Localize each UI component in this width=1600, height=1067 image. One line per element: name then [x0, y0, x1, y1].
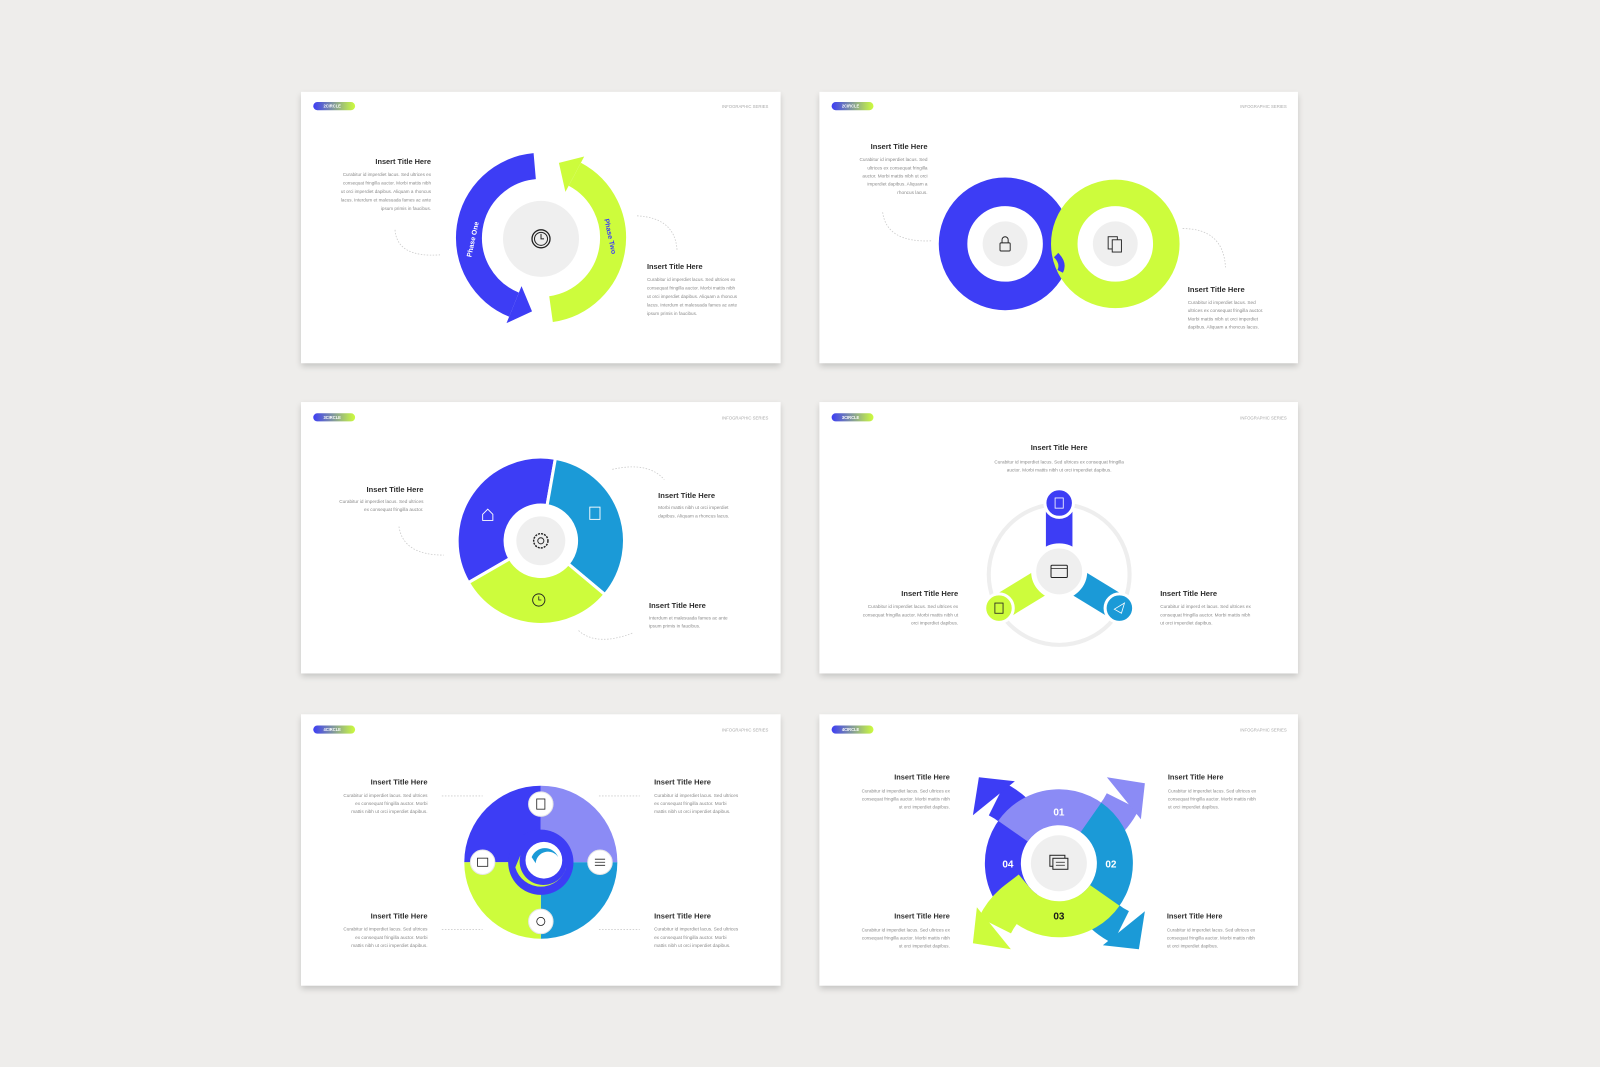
panel: slide 5 four-quadrant swirl	[301, 714, 781, 986]
text block bottom left: ex consequat fringilla auctor. Morbi	[355, 935, 428, 940]
text block right	[1188, 285, 1263, 330]
text block top left: Insert Title Here	[894, 772, 950, 781]
text block left: consequat fringilla auctor. Morbi mattis nibh ut	[863, 612, 959, 617]
arrow 01 lavender	[1013, 777, 1145, 831]
text block top right: mattis nibh ut orci imperdiet dapibus.	[654, 809, 730, 814]
text block right: ut orci imperdiet dapibus.	[1160, 620, 1213, 625]
panel: slide 2 linked rings	[819, 92, 1298, 363]
center folder	[1034, 546, 1085, 597]
text block right: consequat fringilla auctor. Morbi mattis nibh	[1160, 612, 1251, 617]
text block left: consequat fringilla auctor. Morbi mattis nibh	[343, 180, 431, 185]
text block top: Insert Title Here	[1031, 443, 1088, 452]
text block bottom left: ut orci imperdiet dapibus.	[899, 943, 950, 948]
text block right bottom	[649, 601, 728, 629]
header pill: 4CIRCLE	[323, 727, 341, 732]
numbers: 02	[1105, 859, 1117, 870]
arrow phase one blue: Phase One	[466, 221, 481, 258]
header series label: INFOGRAPHIC SERIES	[722, 415, 769, 420]
text block bottom right: mattis nibh ut orci imperdiet dapibus.	[654, 943, 730, 948]
text block left: imperdiet dapibus. Aliquam a	[867, 182, 928, 187]
header pill: 3CIRCLE	[842, 415, 860, 420]
text block right: ipsum primis in faucibus.	[647, 311, 697, 316]
text block right: ultrices ex consequat fringilla auctor.	[1188, 308, 1263, 313]
text block top left	[862, 772, 951, 809]
text block right: Curabitur id imperd et lacus. Sed ultrices ex	[1160, 604, 1252, 609]
text block top right: Curabitur id imperdiet lacus. Sed ultrices	[654, 793, 739, 798]
text block bottom right: Insert Title Here	[654, 911, 711, 920]
text block top left: consequat fringilla auctor. Morbi mattis nibh	[862, 796, 950, 801]
text block bottom right: Curabitur id imperdiet lacus. Sed ultrices	[654, 927, 739, 932]
numbers: 04	[1002, 859, 1014, 870]
dashed leader lines	[442, 796, 640, 930]
connector right	[1183, 229, 1226, 267]
spoke cyan	[1059, 571, 1134, 622]
text block bottom right	[1167, 911, 1256, 948]
segment lime with clock icon	[468, 559, 605, 624]
text block right: consequat fringilla auctor. Morbi mattis nibh	[647, 285, 736, 290]
text block bottom left: consequat fringilla auctor. Morbi mattis nibh	[862, 935, 950, 940]
header pill	[313, 413, 355, 421]
text block top right: ut orci imperdiet dapibus.	[1168, 804, 1219, 809]
text block right: ut orci imperdiet dapibus. Aliquam a rhoncus	[647, 294, 738, 299]
text block right: Curabitur id imperdiet lacus. Sed ultrices ex	[647, 277, 736, 282]
arrows diagram	[973, 777, 1145, 949]
header series label: INFOGRAPHIC SERIES	[1240, 415, 1287, 420]
spoke blue	[1045, 489, 1073, 571]
icon circles	[470, 792, 612, 934]
swirl diagram	[464, 786, 617, 939]
connector left	[395, 230, 440, 255]
numbers: 01	[1053, 807, 1065, 818]
panel: slide 1 two-phase cycle	[301, 92, 781, 363]
header pill	[832, 726, 873, 734]
text block left	[339, 485, 424, 512]
arrow phase two lime: Phase Two	[602, 218, 617, 255]
text block bottom left: mattis nibh ut orci imperdiet dapibus.	[351, 943, 428, 948]
connector left	[399, 527, 444, 555]
text block left: Curabitur id imperdiet lacus. Sed ultrices ex	[343, 172, 432, 177]
text block top right: Insert Title Here	[1168, 772, 1223, 781]
text block left: orci imperdiet dapibus.	[911, 620, 958, 625]
text block left: Curabitur id imperdiet lacus. Sed ultrices	[339, 499, 424, 504]
arrow 02 cyan	[1091, 817, 1145, 949]
text block bottom left: Curabitur id imperdiet lacus. Sed ultrices	[343, 927, 428, 932]
text block top right: Curabitur id imperdiet lacus. Sed ultrices ex	[1168, 788, 1257, 793]
text block bottom left	[343, 911, 428, 948]
connector right top	[612, 467, 664, 480]
text block bottom left: Insert Title Here	[371, 911, 428, 920]
text block left: rhoncus lacus.	[897, 190, 928, 195]
text block bottom right: Insert Title Here	[1167, 911, 1222, 920]
header series label: INFOGRAPHIC SERIES	[1240, 104, 1287, 109]
text block left	[341, 157, 432, 211]
text block right: Morbi mattis nibh ut orci imperdiet	[1188, 316, 1259, 321]
text block bottom right	[654, 911, 739, 948]
text block left: Curabitur id imperdiet lacus. Sed	[860, 157, 928, 162]
segment cyan with book icon	[547, 458, 625, 595]
text block top right: ex consequat fringilla auctor. Morbi	[654, 801, 727, 806]
text block right top: Morbi mattis nibh ut orci imperdiet	[658, 505, 729, 510]
text block top left: Curabitur id imperdiet lacus. Sed ultrices	[343, 793, 428, 798]
segment blue with house icon	[457, 457, 555, 583]
text block right: lacus. Interdum et malesuada fames ac ante	[647, 302, 738, 307]
text block top right	[1168, 772, 1257, 809]
header series label: INFOGRAPHIC SERIES	[1240, 728, 1287, 733]
header series label: INFOGRAPHIC SERIES	[722, 728, 769, 733]
text block top left: Insert Title Here	[371, 778, 428, 787]
header pill: 4CIRCLE	[842, 727, 860, 732]
arrow phase two lime	[551, 157, 617, 309]
text block left: Insert Title Here	[367, 485, 423, 494]
text block bottom left	[862, 911, 951, 948]
text block left: ex consequat fringilla auctor.	[364, 507, 423, 512]
text block top left: mattis nibh ut orci imperdiet dapibus.	[351, 809, 428, 814]
panel: slide 4 three spokes	[819, 402, 1298, 673]
arrow 04 blue	[973, 777, 1027, 909]
panel: slide 6 four arrows	[819, 714, 1298, 986]
text block left: ultrices ex consequat fringilla	[867, 165, 928, 170]
header pill	[313, 726, 355, 734]
text block top left: Curabitur id imperdiet lacus. Sed ultrices ex	[862, 788, 951, 793]
text block bottom left: Curabitur id imperdiet lacus. Sed ultrices ex	[862, 927, 951, 932]
center circle with clock icon	[503, 201, 579, 277]
text block right: Curabitur id imperdiet lacus. Sed	[1188, 300, 1256, 305]
text block top left	[343, 778, 428, 814]
text block top	[994, 443, 1124, 472]
text block left	[860, 142, 928, 195]
text block left: auctor. Morbi mattis nibh ut orci	[862, 174, 928, 179]
text block top right: consequat fringilla auctor. Morbi mattis nibh	[1168, 796, 1256, 801]
icons	[478, 799, 605, 926]
text block left: lacus. Interdum et malesuada fames ac ante	[341, 197, 431, 202]
link blue over lime	[1056, 255, 1062, 271]
text block left: ut orci imperdiet dapibus. Aliquam a rhoncus	[341, 189, 432, 194]
header pill	[313, 102, 355, 110]
text block right: Insert Title Here	[647, 262, 703, 271]
text block right top: dapibus. Aliquam a rhoncus lacus.	[658, 513, 729, 518]
text block top left: ex consequat fringilla auctor. Morbi	[355, 801, 428, 806]
text block top: Curabitur id imperdiet lacus. Sed ultrices ex consequat fringilla	[994, 459, 1124, 464]
text block left: ipsum primis in faucibus.	[381, 206, 431, 211]
header pill: 3CIRCLE	[323, 415, 341, 420]
center gear	[516, 516, 565, 565]
text block right top: Insert Title Here	[658, 491, 715, 500]
text block top right	[654, 778, 739, 814]
text block bottom right: consequat fringilla auctor. Morbi mattis nibh	[1167, 935, 1255, 940]
text block right: Insert Title Here	[1160, 589, 1217, 598]
connector right bottom	[579, 631, 634, 639]
text block left	[863, 589, 959, 625]
text block bottom right: ex consequat fringilla auctor. Morbi	[654, 935, 727, 940]
header pill	[832, 102, 873, 110]
ring lime with document icon	[1064, 193, 1166, 295]
text block top: auctor. Morbi mattis nibh ut orci imperdiet dapibus.	[1007, 467, 1112, 472]
text block right	[1160, 589, 1252, 625]
text block right bottom: Insert Title Here	[649, 601, 706, 610]
ring blue with lock icon	[953, 192, 1057, 296]
text block bottom right: Curabitur id imperdiet lacus. Sed ultrices ex	[1167, 927, 1256, 932]
text block left: Insert Title Here	[871, 142, 928, 151]
arrow 03 lime	[973, 895, 1105, 949]
header pill: 2CIRCLE	[323, 104, 341, 109]
text block right	[647, 262, 738, 316]
text block bottom left: Insert Title Here	[894, 911, 950, 920]
ring outline	[989, 504, 1130, 645]
text block left: Curabitur id imperdiet lacus. Sed ultrices ex	[868, 604, 959, 609]
text block right bottom: ipsum primis in faucibus.	[649, 624, 700, 629]
text block bottom right: ut orci imperdiet dapibus.	[1167, 943, 1218, 948]
text block right: Insert Title Here	[1188, 285, 1245, 294]
text block top right: Insert Title Here	[654, 778, 711, 787]
header pill: 2CIRCLE	[842, 104, 860, 109]
header series label: INFOGRAPHIC SERIES	[722, 104, 769, 109]
text block right top	[658, 491, 729, 518]
arrow phase one blue	[466, 166, 535, 323]
connector right	[637, 216, 677, 250]
panel: slide 3 three-part cycle	[301, 402, 781, 673]
connector left	[883, 212, 932, 241]
header pill	[832, 413, 873, 421]
text block top left: ut orci imperdiet dapibus.	[899, 804, 950, 809]
numbers	[1002, 807, 1117, 922]
text block left: Insert Title Here	[375, 157, 431, 166]
text block right bottom: Interdum et malesuada fames ac ante	[649, 615, 728, 620]
text block right: dapibus. Aliquam a rhoncus lacus.	[1188, 325, 1259, 330]
center icon	[1022, 826, 1096, 900]
numbers: 03	[1053, 911, 1065, 922]
text block left: Insert Title Here	[901, 589, 958, 598]
spoke lime	[985, 571, 1059, 622]
